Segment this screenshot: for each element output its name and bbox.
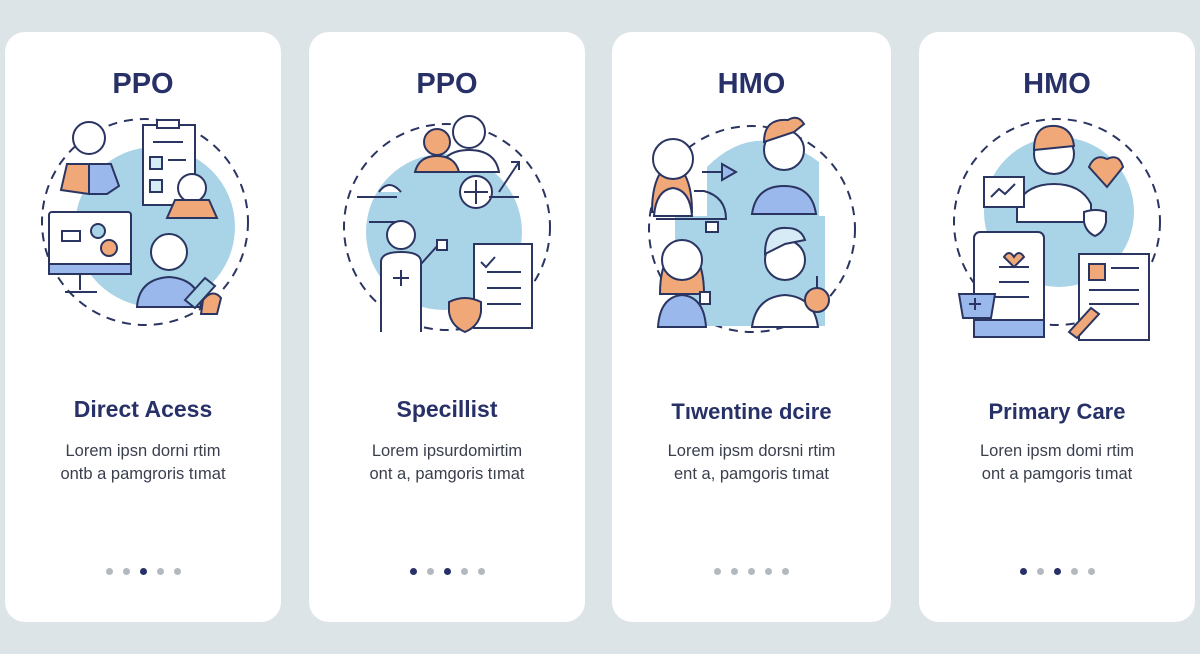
card 1: PPO direct access [5,32,281,622]
body text: Loren ipsm domi rtim [980,442,1134,460]
card 3: HMO referral [612,32,891,622]
pagination dots [714,568,789,575]
illustration: referral people [648,116,856,333]
body text: ontb a pamgroris tımat [60,465,226,483]
body text: ont a, pamgoris tımat [370,465,524,483]
body text: ont a pamgoris tımat [982,465,1132,483]
pagination dots [410,568,485,575]
subtitle: Primary Care [988,399,1125,424]
card 4: HMO primary care [919,32,1195,622]
subtitle: Specillist [396,396,497,422]
pagination dots [106,568,181,575]
body text [980,442,1134,483]
subtitle: Direct Acess [74,396,212,422]
title: HMO [1023,68,1091,100]
title: PPO [416,68,478,100]
body text: Lorem ipsn dorni rtim [66,442,220,460]
illustration: specialist [343,115,551,334]
body text: ent a, pamgoris tımat [674,465,829,483]
pagination dots [1020,568,1095,575]
illustration: direct access [41,118,249,326]
title: HMO [718,68,785,100]
body text [370,442,524,483]
title: PPO [112,68,174,100]
card 2: PPO specialist [309,32,585,622]
subtitle: Tıwentine dcire [671,399,832,424]
illustration: primary care [953,118,1161,341]
body text [60,442,226,483]
body text: Lorem ipsm dorsni rtim [668,442,835,460]
body text: Lorem ipsurdomirtim [372,442,522,460]
body text [668,442,835,483]
